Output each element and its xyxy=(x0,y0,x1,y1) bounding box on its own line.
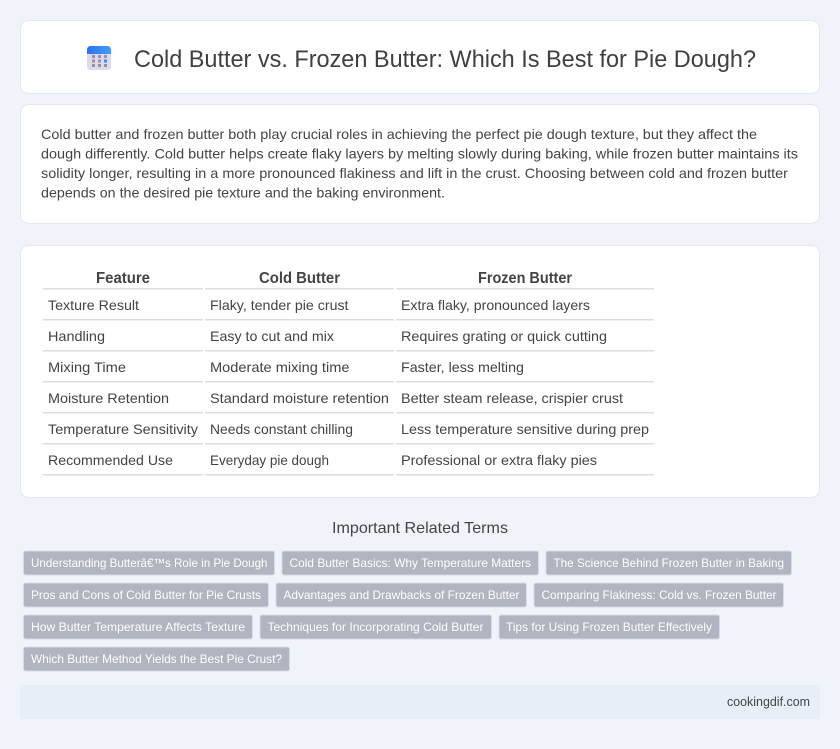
intro paragraph: Cold butter and frozen butter both play crucial roles in achieving the perfect pie dough texture, but they affect the xyxy=(41,126,757,142)
tag xyxy=(24,615,252,639)
table header: Cold Butter xyxy=(259,270,340,287)
intro paragraph: solidity longer, resulting in a more pronounced flakiness and lift in the crust. Choosing between cold and frozen butter xyxy=(41,165,788,181)
table header xyxy=(96,270,572,287)
table header: Feature xyxy=(96,270,150,287)
row: texture result: Texture Result xyxy=(48,297,139,313)
tag: Advantages and Drawbacks of Frozen Butter xyxy=(284,588,520,602)
related term tags xyxy=(24,551,792,671)
icon: calendar xyxy=(87,46,111,70)
intro paragraph xyxy=(41,126,798,200)
row: temperature sensitivity xyxy=(48,421,649,437)
tag xyxy=(534,583,784,607)
row: handling: Requires grating or quick cutting xyxy=(401,328,607,344)
row: temperature sensitivity: Needs constant chilling xyxy=(210,421,353,437)
tag: Understanding Butterâ€™s Role in Pie Dough xyxy=(31,556,268,570)
tag xyxy=(260,615,492,639)
tag xyxy=(24,551,274,575)
row: moisture retention: Standard moisture retention xyxy=(210,390,389,406)
table header: Frozen Butter xyxy=(478,270,572,287)
tag xyxy=(499,615,720,639)
tag: Which Butter Method Yields the Best Pie Crust? xyxy=(31,652,282,666)
row: texture result xyxy=(48,297,590,313)
tag xyxy=(546,551,792,575)
panel: introduction xyxy=(20,104,820,224)
intro paragraph: dough differently. Cold butter helps create flaky layers by melting slowly during baking, while frozen butter maintains its xyxy=(41,146,798,162)
row: mixing time: Faster, less melting xyxy=(401,359,524,375)
tag xyxy=(276,583,526,607)
row: recommended use xyxy=(48,452,597,468)
tag: Techniques for Incorporating Cold Butter xyxy=(268,620,484,634)
row: moisture retention: Better steam release, crispier crust xyxy=(401,390,623,406)
row: handling: Easy to cut and mix xyxy=(210,328,334,344)
panel: comparison table xyxy=(20,246,820,498)
row: recommended use: Recommended Use xyxy=(48,452,173,468)
row: texture result: Extra flaky, pronounced layers xyxy=(401,297,590,313)
tag: Pros and Cons of Cold Butter for Pie Crusts xyxy=(31,588,261,602)
heading: related terms: Important Related Terms xyxy=(332,520,508,537)
tag: Cold Butter Basics: Why Temperature Matters xyxy=(290,556,531,570)
footer source text: cookingdif.com xyxy=(727,694,810,709)
tag: How Butter Temperature Affects Texture xyxy=(31,620,245,634)
footer xyxy=(20,685,820,719)
row: recommended use: Professional or extra flaky pies xyxy=(401,452,597,468)
row: moisture retention xyxy=(48,390,623,406)
row: handling xyxy=(48,328,607,344)
row: temperature sensitivity: Temperature Sensitivity xyxy=(48,421,198,437)
row: moisture retention: Moisture Retention xyxy=(48,390,169,406)
row: mixing time: Mixing Time xyxy=(48,359,126,375)
title: Cold Butter vs. Frozen Butter: Which Is Best for Pie Dough? xyxy=(134,46,756,73)
row: mixing time: Moderate mixing time xyxy=(210,359,350,375)
tag xyxy=(24,647,290,671)
tag: Comparing Flakiness: Cold vs. Frozen Butter xyxy=(542,588,776,602)
intro paragraph: depends on the desired pie texture and the baking environment. xyxy=(41,184,445,200)
tag xyxy=(24,583,268,607)
tag: The Science Behind Frozen Butter in Baking xyxy=(554,556,784,570)
tag xyxy=(282,551,538,575)
row: texture result: Flaky, tender pie crust xyxy=(210,297,349,313)
row: recommended use: Everyday pie dough xyxy=(210,452,329,468)
tag: Tips for Using Frozen Butter Effectively xyxy=(506,620,712,634)
row: mixing time xyxy=(48,359,524,375)
row: handling: Handling xyxy=(48,328,105,344)
panel: header xyxy=(20,20,820,94)
row: temperature sensitivity: Less temperature sensitive during prep xyxy=(401,421,649,437)
